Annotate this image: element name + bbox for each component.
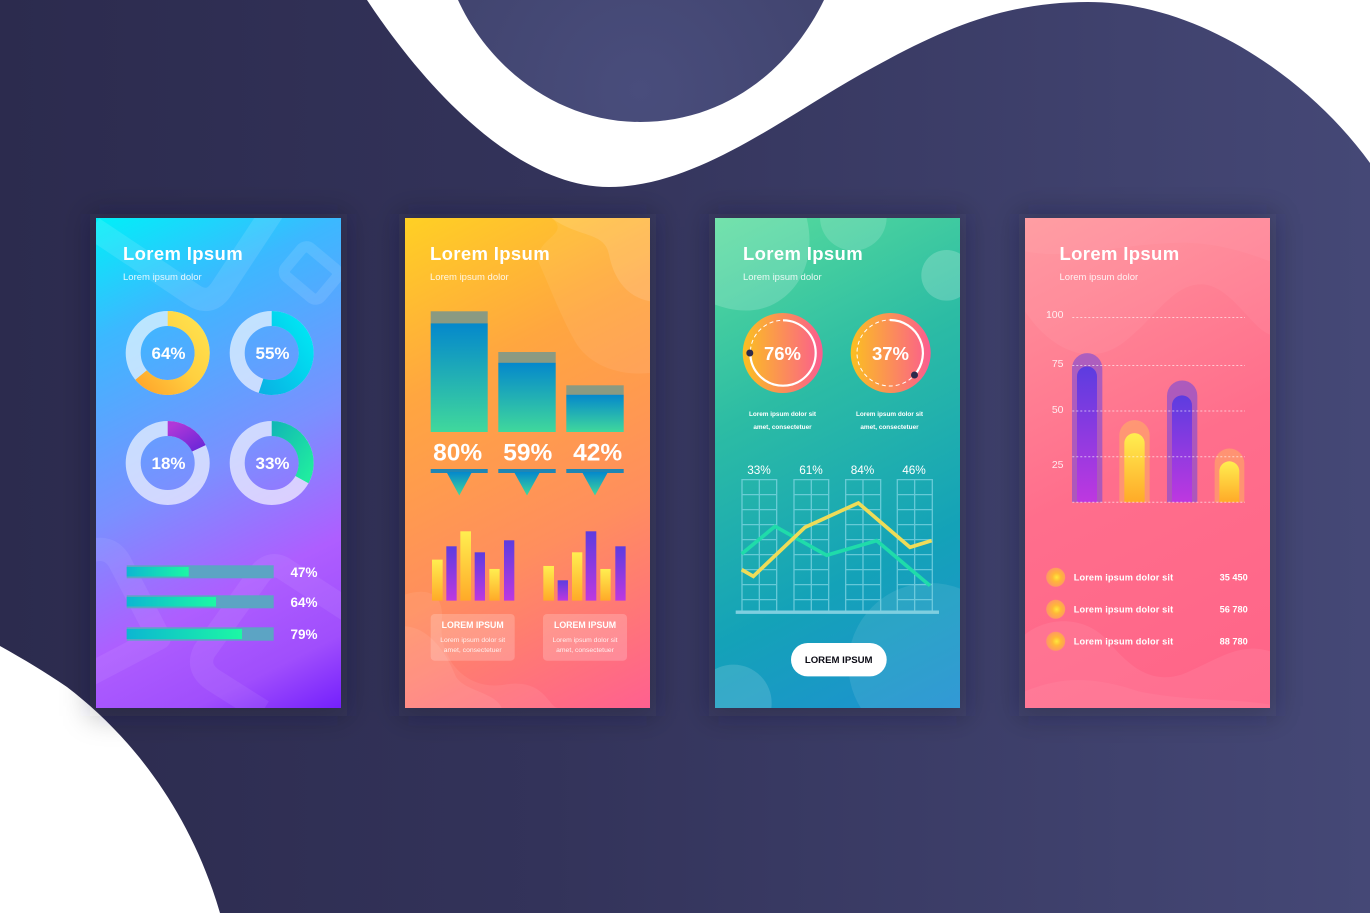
panel: gauges and line chart	[715, 218, 960, 708]
caption box right: LOREM IPSUM	[554, 620, 616, 630]
column 59%	[498, 352, 556, 496]
small bar chart right	[543, 531, 626, 601]
gauge 37%: 37%	[872, 343, 909, 364]
caption box left: LOREM IPSUM	[442, 620, 504, 630]
caption box right	[543, 614, 627, 661]
caption box left: Lorem ipsum dolor sit	[440, 637, 505, 644]
progress bar 79%	[127, 627, 318, 642]
heading	[1060, 243, 1180, 283]
bar chart: 50	[1052, 404, 1064, 416]
list row 2: Lorem ipsum dolor sit	[1074, 604, 1173, 614]
heading	[743, 243, 863, 283]
list row 3	[1046, 632, 1248, 651]
donut 55%	[237, 318, 306, 388]
panel: bar charts	[405, 218, 650, 708]
gauge caption left	[749, 411, 817, 431]
heading: Lorem ipsum dolor	[743, 272, 822, 283]
small bar chart left	[432, 531, 514, 601]
donut 18%: 18%	[151, 454, 186, 473]
progress bar 64%: 64%	[290, 595, 318, 610]
list row 2	[1046, 600, 1248, 619]
donut 64%	[133, 318, 202, 388]
heading	[123, 243, 243, 283]
bar chart	[1046, 309, 1245, 502]
heading: Lorem ipsum dolor	[123, 272, 202, 283]
heading	[430, 243, 550, 283]
donut 33%: 33%	[255, 454, 290, 473]
button	[791, 643, 887, 676]
bar chart: 100	[1046, 309, 1064, 321]
line chart	[736, 480, 939, 614]
gauge 37%	[851, 313, 931, 393]
donut 18%	[133, 428, 202, 498]
button: LOREM IPSUM	[805, 655, 873, 666]
column 59%: 59%	[503, 440, 553, 466]
column 80%	[431, 311, 488, 496]
column value labels: 33%	[747, 463, 771, 477]
heading: Lorem Ipsum	[743, 243, 863, 264]
heading: Lorem ipsum dolor	[1060, 272, 1138, 283]
list row 2: 56 780	[1220, 604, 1248, 614]
column value labels: 61%	[799, 463, 823, 477]
heading: Lorem Ipsum	[430, 243, 550, 264]
bar chart: 25	[1052, 459, 1064, 471]
gauge 76%: 76%	[764, 343, 801, 364]
list row 3: 88 780	[1220, 636, 1248, 646]
column value labels: 84%	[851, 463, 875, 477]
column 80%: 80%	[433, 440, 482, 466]
list row 3: Lorem ipsum dolor sit	[1074, 636, 1173, 646]
donut 64%: 64%	[151, 344, 186, 363]
heading: Lorem ipsum dolor	[430, 272, 509, 283]
heading: Lorem Ipsum	[1060, 243, 1180, 264]
background top circle	[458, 0, 824, 122]
gauge caption left: Lorem ipsum dolor sit	[749, 411, 817, 418]
list row 1: 35 450	[1220, 572, 1248, 582]
column value labels	[747, 463, 926, 477]
panel: rounded bars and list	[1025, 218, 1270, 708]
caption box right: amet, consectetuer	[556, 647, 615, 654]
list row 1: Lorem ipsum dolor sit	[1074, 572, 1173, 582]
column 42%	[566, 385, 624, 496]
gauge caption left: amet, consectetuer	[753, 424, 812, 431]
panel: donut charts	[89, 211, 349, 711]
donut 33%	[237, 428, 306, 498]
gauge caption right	[856, 411, 924, 431]
gauge caption right: Lorem ipsum dolor sit	[856, 411, 924, 418]
progress bar 47%	[127, 565, 318, 580]
list row 1	[1046, 568, 1248, 587]
caption box left	[431, 614, 515, 661]
caption box right: Lorem ipsum dolor sit	[553, 637, 618, 644]
progress bar 79%: 79%	[290, 627, 318, 642]
column 42%: 42%	[573, 440, 622, 466]
heading: Lorem Ipsum	[123, 243, 243, 264]
progress bar 47%: 47%	[290, 565, 318, 580]
gauge caption right: amet, consectetuer	[860, 424, 919, 431]
bar chart: 75	[1052, 358, 1064, 370]
gauge 76%	[743, 313, 823, 393]
progress bar 64%	[127, 595, 318, 610]
column value labels: 46%	[902, 463, 926, 477]
caption box left: amet, consectetuer	[444, 647, 502, 654]
panel shadows	[90, 214, 1276, 716]
donut 55%: 55%	[255, 344, 290, 363]
